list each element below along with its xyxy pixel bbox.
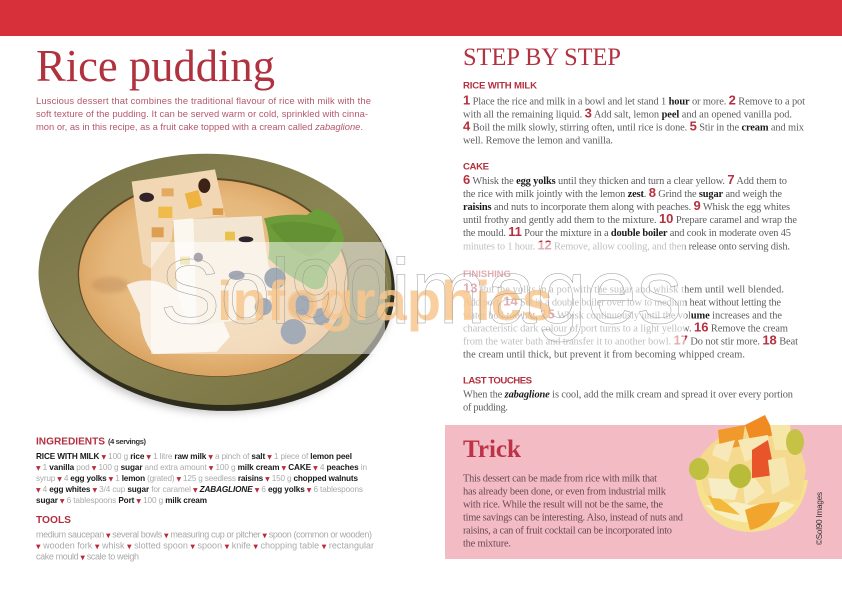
cream sauce [127,280,230,354]
text: cake steps: 6 Whisk the egg yolks until they thicken and turn a clear yellow. 7 Add them to [463,172,787,187]
plate rim [30,142,400,417]
intro text [36,95,371,132]
mint leaf [264,208,344,289]
trick text: time savings can be interesting. Also, instead of nuts and [463,512,684,524]
tool list: ▼ wooden fork ▼ whisk ▼ slotted spoon ▼ spoon ▼ knife ▼ chopping table ▼ rectangular [36,540,374,550]
ingredient list: RICE WITH MILK ▼ 100 g rice ▼ 1 litre raw milk ▼ a pinch of salt ▼ 1 piece of lemon peel [36,452,352,461]
top red band [0,0,842,36]
heading: rice with milk: RICE WITH MILK [463,80,537,92]
ingredients [36,436,367,505]
text: finishing steps: 13 Put the yolks in a pot with the sugar and whisk them until well blended. [463,280,784,296]
section heading: step by step: STEP BY STEP [463,42,621,71]
plate well [73,171,354,384]
steps: rice with milk [463,80,805,146]
text: cake steps: the mould. 11 Pour the mixture in a double boiler and cook in moderate oven 45 [463,224,791,239]
text: rice with milk steps: 4 Boil the milk slowly, stirring often, until rice is done. 5 Stir in the cream and mix [463,118,805,134]
text: rice with milk steps: well. Remove the lemon and vanilla. [463,136,613,146]
text: last touches [463,390,794,414]
heading: cake: CAKE [463,162,490,172]
ingredient list: ▼ 4 egg whites ▼ 3/4 cup sugar for caramel ▼ ZABAGLIONE ▼ 6 egg yolks ▼ 6 tablespoons [36,485,363,494]
text: finishing steps: from the water bath and transfer it to another bowl. 17 Do not stir more. 18 Beat [463,332,798,348]
text: last touches: When the zabaglione is cool, add the milk cream and spread it over every portion [463,390,794,400]
title: Rice pudding [36,40,275,91]
watermark: infographics: infographics [217,269,553,332]
plate photo [30,142,403,423]
panel: trick [445,415,842,559]
heading: finishing: FINISHING [463,269,511,280]
ingredient list: sugar ▼ 6 tablespoons Port ▼ 100 g milk cream [36,496,207,505]
photo credit: ©Sol90 Images [815,492,824,545]
tool list [36,530,374,562]
front cake slice [173,216,275,327]
text: cake steps [463,172,797,252]
steps: finishing [463,269,798,360]
text: rice with milk steps: 1 Place the rice and milk in a bowl and let stand 1 hour or more. 2 Remove to a pot [463,92,805,108]
steps: last touches [463,376,794,414]
steps: cake [463,162,797,252]
trick text [463,474,684,550]
heading: ingredients: INGREDIENTS [36,436,105,448]
watermark lightening over text edge [463,242,685,346]
text: rice with milk steps [463,92,805,146]
text: cake steps: until frothy and gently add them to the mixture. 10 Prepare caramel and wrap the [463,211,797,226]
text: cake steps: the rice with milk jointly with the lemon zest. 8 Grind the sugar and weigh the [463,185,782,200]
tool list: medium saucepan ▼ several bowls ▼ measuring cup or pitcher ▼ spoon (common or wooden) [36,530,372,540]
text: finishing steps [463,280,798,360]
blueberries [255,268,330,344]
ingredient list: syrup ▼ 4 egg yolks ▼ 1 lemon (grated) ▼ 125 g seedless raisins ▼ 150 g chopped walnuts [36,474,358,483]
text: cake steps: minutes to 1 hour. 12 Remove, allow cooling, and then release onto serving dish. [463,238,790,252]
text: cake steps: raisins and nuts to incorporate them along with peaches. 9 Whisk the egg whites [463,198,790,213]
intro text: Luscious dessert that combines the traditional flavour of rice with milk with the [36,95,371,106]
trick text: has already been done, or even from industrial milk [463,486,667,498]
trick heading: Trick [463,436,521,463]
watermark: Sol90images: Sol90images [160,241,682,343]
intro text: soft texture of the pudding. It can be served warm or cold, sprinkled with cinna- [36,108,368,119]
intro text: mon or, as in this recipe, as a fruit cake topped with a cream called zabaglione. [36,121,363,132]
servings note: (4 servings) [108,437,146,446]
cinnamon dusting [92,277,128,293]
text: finishing steps: characteristic dark colour of port turns to a light yellow. 16 Remove the cream [463,320,788,334]
text: last touches: of pudding. [463,402,508,414]
trick text: the mixture. [463,538,511,550]
text: finishing steps: water boil too hot. 15 Whisk continuously until the volume increases and the [463,306,782,322]
watermark panel [151,242,385,354]
trick text: raisins, a can of fruit cocktail can be incorporated into [463,526,672,536]
watermark text [160,241,682,343]
text: finishing steps: Add port. 14 Set in a double boiler over low to medium heat without letting the [463,294,781,308]
icon: fruit cocktail bowl [689,415,808,532]
plate shadow [47,170,393,413]
text: finishing steps: the cream until thick, but prevent it from becoming whipped cream. [463,350,745,360]
ingredient list [36,452,367,505]
ingredient list: ▼ 1 vanilla pod ▼ 100 g sugar and extra amount ▼ 100 g milk cream ▼ CAKE ▼ 4 peaches in [36,463,367,472]
back cake slice [132,169,227,268]
heading: last touches: LAST TOUCHES [463,376,533,386]
text: rice with milk steps: with all the remaining liquid. 3 Add salt, lemon peel and an opened vanilla pod. [463,106,792,120]
trick text: with rice. While the result will not be the same, the [463,500,663,510]
tools [36,514,374,562]
trick text: This dessert can be made from rice with milk that [463,474,657,484]
tool list: cake mould ▼ scale to weigh [36,552,139,562]
plate base rim [32,145,403,423]
heading: tools: TOOLS [36,514,71,526]
